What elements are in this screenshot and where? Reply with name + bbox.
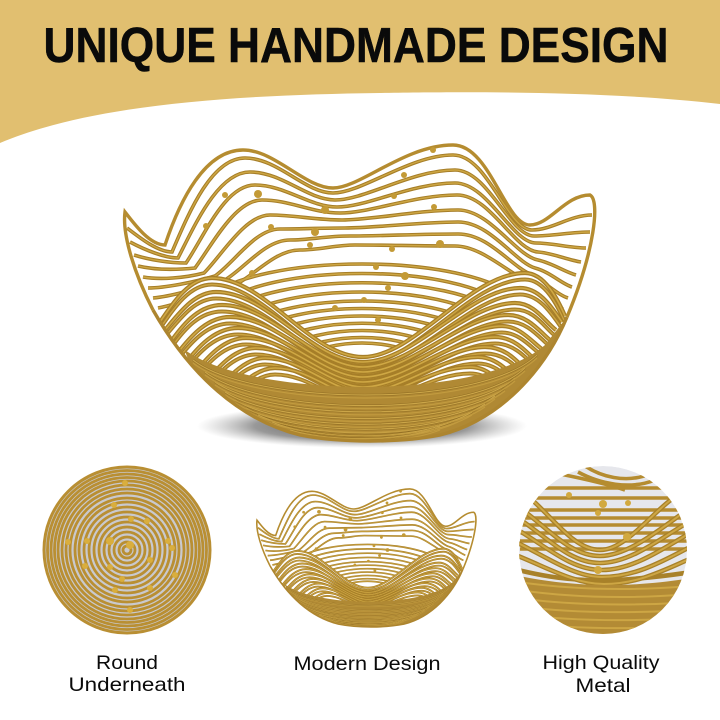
basket shadow	[197, 404, 527, 448]
banner background	[0, 0, 720, 143]
main basket photo	[125, 145, 595, 442]
weld spots	[203, 147, 444, 323]
label: high quality metal: High Quality	[542, 652, 660, 674]
label: round underneath	[68, 652, 186, 696]
close-up circle	[515, 466, 692, 640]
label: round underneath: Round	[96, 652, 158, 674]
label: high quality metal	[542, 652, 660, 697]
bottom view weld spots	[65, 480, 178, 613]
label: modern design: Modern Design	[294, 653, 440, 675]
title: UNIQUE HANDMADE DESIGN	[44, 19, 668, 73]
small basket photo	[257, 489, 476, 627]
label: round underneath: Underneath	[68, 674, 186, 696]
bottom view circle	[43, 466, 211, 634]
basket lower edge	[153, 310, 567, 441]
label: high quality metal: Metal	[576, 675, 630, 697]
basket rim	[125, 145, 595, 317]
